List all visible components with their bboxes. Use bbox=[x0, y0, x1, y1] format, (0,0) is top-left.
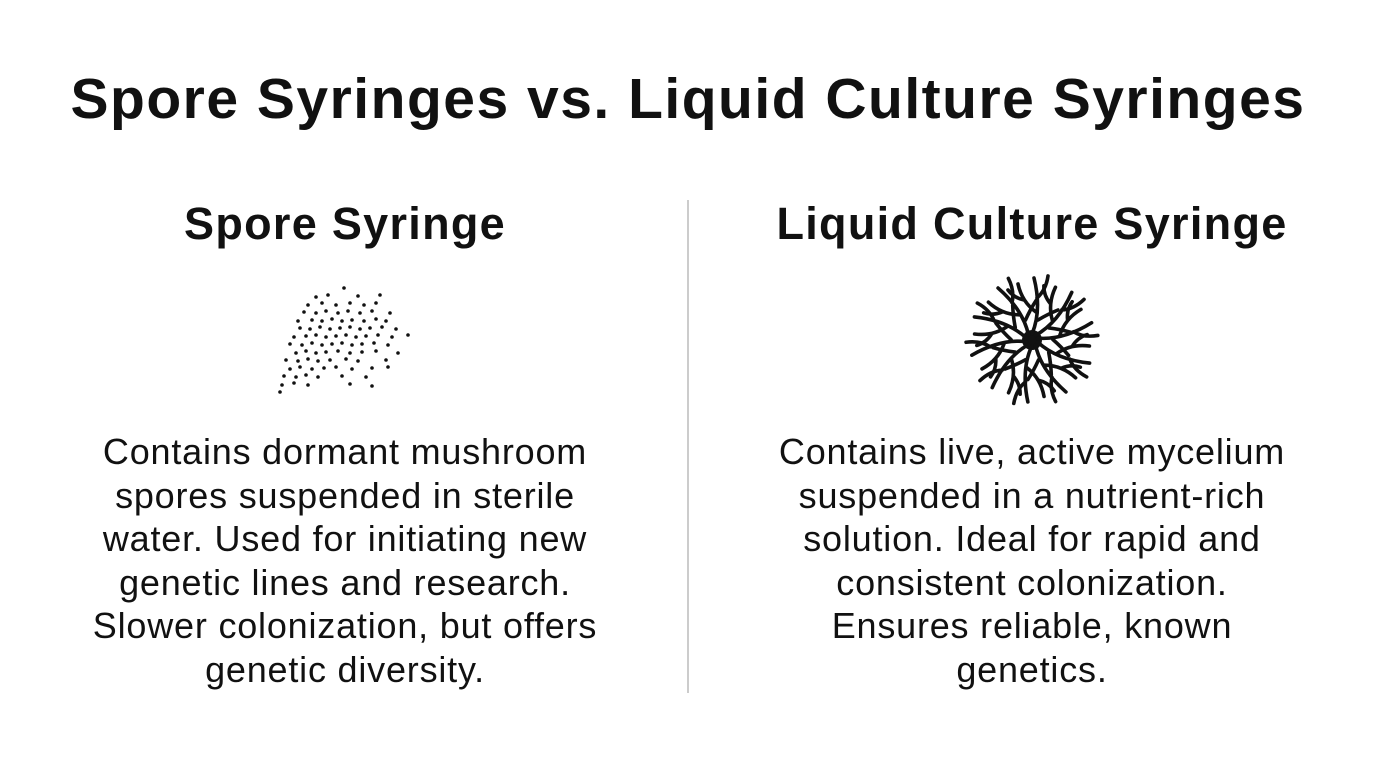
icon: spores bbox=[278, 286, 410, 394]
heading: spore syringe: Spore Syringe bbox=[184, 198, 506, 249]
text: spore description: Contains dormant mushroom bbox=[103, 431, 587, 472]
text: spore description bbox=[93, 431, 597, 690]
text: spore description: spores suspended in sterile bbox=[115, 475, 575, 516]
panel: liquid culture syringe bbox=[776, 198, 1288, 690]
text: spore description: Slower colonization, but offers bbox=[93, 605, 597, 646]
text: spore description: genetic diversity. bbox=[205, 649, 485, 690]
text: spore description: water. Used for initiating new bbox=[103, 518, 587, 559]
text: liquid culture description: Ensures reliable, known bbox=[832, 605, 1232, 646]
text: liquid culture description: Contains live, active mycelium bbox=[779, 431, 1285, 472]
title: Spore Syringes vs. Liquid Culture Syringes bbox=[71, 67, 1305, 131]
text: liquid culture description bbox=[779, 431, 1285, 690]
heading: liquid culture syringe: Liquid Culture Syringe bbox=[776, 198, 1288, 249]
text: spore description: genetic lines and research. bbox=[119, 562, 571, 603]
text: liquid culture description: solution. Ideal for rapid and bbox=[803, 518, 1261, 559]
panel: spore syringe bbox=[93, 198, 597, 690]
icon: mycelium bbox=[964, 274, 1100, 406]
text: liquid culture description: suspended in a nutrient-rich bbox=[799, 475, 1265, 516]
text: liquid culture description: genetics. bbox=[956, 649, 1108, 690]
text: liquid culture description: consistent colonization. bbox=[836, 562, 1228, 603]
